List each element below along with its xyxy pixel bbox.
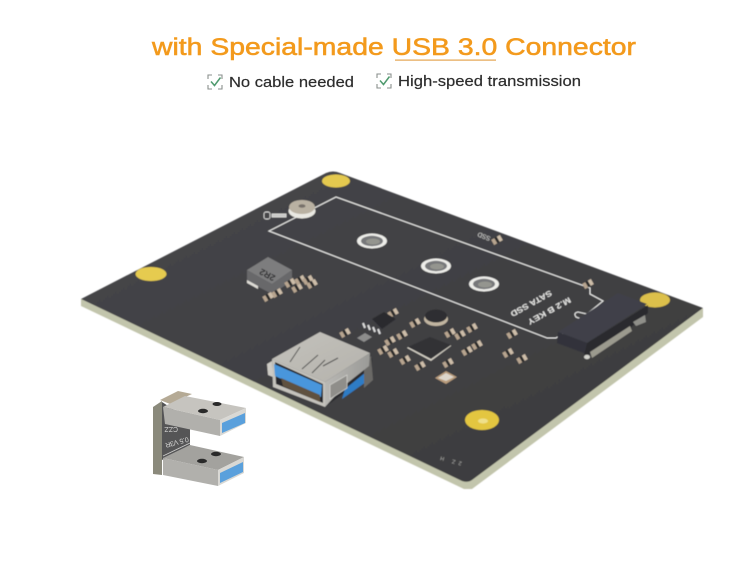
small components cluster bbox=[339, 279, 594, 371]
USB 3.0 port bbox=[267, 332, 373, 407]
main controller chip bbox=[407, 337, 451, 361]
screw standoff bbox=[288, 200, 316, 218]
gold mounting pad: left bbox=[136, 267, 166, 281]
lower USB plug bbox=[163, 445, 244, 486]
crystal bbox=[435, 371, 457, 384]
mounting hole 3 bbox=[469, 276, 499, 292]
small inductor bbox=[424, 310, 448, 326]
silkscreen: M.2 B KEY: M.2 B KEY bbox=[525, 295, 572, 327]
bridge PCB: CZZ bbox=[164, 425, 178, 432]
mounting hole 2 bbox=[421, 258, 451, 274]
screw silkscreen icon bbox=[264, 212, 286, 219]
gold mounting pad: bottom bbox=[465, 410, 499, 430]
power inductor bbox=[247, 257, 292, 294]
SSD slot outline bbox=[269, 197, 603, 338]
gold mounting pad: top bbox=[322, 174, 350, 188]
M.2 adapter circuit board bbox=[81, 172, 703, 489]
LED bbox=[491, 235, 503, 245]
board surface bbox=[81, 172, 703, 482]
bridge PCB bbox=[162, 402, 190, 460]
title: with Special-made USB 3.0 Connector bbox=[151, 34, 636, 61]
gold mounting pad: right bbox=[640, 292, 670, 308]
feature: high-speed transmission: High-speed transmission bbox=[398, 73, 581, 90]
bridge metal spine bbox=[153, 391, 192, 475]
silkscreen: SATA SSD: SATA SSD bbox=[509, 288, 553, 319]
M.2 socket bbox=[557, 293, 648, 359]
silkscreen: board code: 2Z H bbox=[440, 454, 463, 466]
board edge bbox=[81, 299, 703, 489]
upper USB plug bbox=[163, 396, 246, 436]
feature: no cable needed: No cable needed bbox=[229, 74, 354, 91]
USB bridge connector bbox=[153, 391, 246, 486]
bridge PCB: 0.5 V3R bbox=[164, 435, 189, 448]
transistor chip bbox=[357, 312, 396, 342]
power inductor: 2R2 bbox=[258, 266, 277, 283]
mounting hole 1 bbox=[357, 234, 387, 248]
small components near inductor bbox=[262, 275, 318, 302]
silkscreen: SSD: SSD bbox=[476, 230, 492, 242]
